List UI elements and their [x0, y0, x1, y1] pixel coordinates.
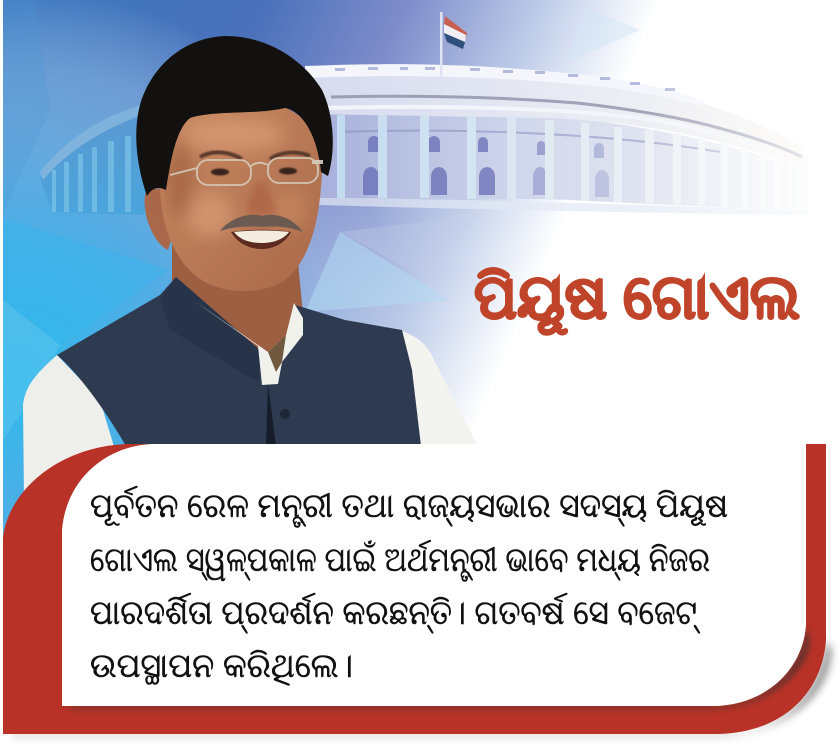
title: ପିୟୂଷ ଗୋଏଲ: [474, 263, 800, 336]
portrait: button: [280, 409, 290, 419]
portrait: mouth: [231, 230, 291, 249]
text line 3: ପାରଦର୍ଶିତା ପ୍ରଦର୍ଶନ କରଛନ୍ତି। ଗତବର୍ଷ ସେ ବଜେଟ୍: [90, 593, 700, 633]
building: arches and windows: [363, 136, 609, 197]
portrait: shirt sleeves: [23, 330, 478, 500]
portrait: eyebrows and eyes: [200, 152, 310, 176]
portrait: neck: [172, 240, 304, 360]
building: columns: [337, 115, 802, 211]
portrait: nose: [248, 182, 276, 216]
portrait: ear: [145, 188, 176, 250]
portrait: waistcoat: [57, 277, 421, 446]
building: right wing wall: [305, 112, 808, 211]
portrait of man: [23, 36, 478, 500]
panel: white text card: [62, 444, 806, 706]
building: parapet and cornice: [305, 64, 810, 172]
background panel: [3, 0, 840, 540]
text block: description: [90, 486, 728, 686]
building: left wing: [40, 104, 145, 215]
portrait: teeth: [234, 230, 289, 243]
parliament building: [40, 60, 820, 225]
text line 4: ଉପସ୍ଥାପନ କରିଥିଲେ।: [90, 647, 353, 686]
building: plinth: [305, 198, 808, 215]
inner shadow: [70, 625, 810, 709]
portrait: face shading: [166, 119, 308, 237]
flag: [440, 12, 467, 76]
portrait: collar lapel shading: [160, 277, 262, 382]
portrait: shirt collar: [193, 300, 303, 385]
portrait: moustache: [220, 215, 303, 232]
portrait: head: [160, 100, 322, 291]
text line 2: ଗୋଏଲ ସ୍ୱଳ୍ପକାଳ ପାଇଁ ଅର୍ଥମନ୍ତ୍ରୀ ଭାବେ ମଧ୍ୟ ନିଜର: [90, 540, 710, 582]
portrait: glasses: [170, 158, 323, 185]
card shadow: [12, 640, 832, 736]
building: fade out: [640, 60, 820, 225]
text line 1: ପୂର୍ବତନ ରେଳ ମନ୍ତ୍ରୀ ତଥା ରାଜ୍ୟସଭାର ସଦସ୍ୟ ପିୟୂଷ: [90, 486, 728, 528]
panel: red card back: [3, 444, 826, 734]
portrait: hair: [136, 36, 333, 196]
